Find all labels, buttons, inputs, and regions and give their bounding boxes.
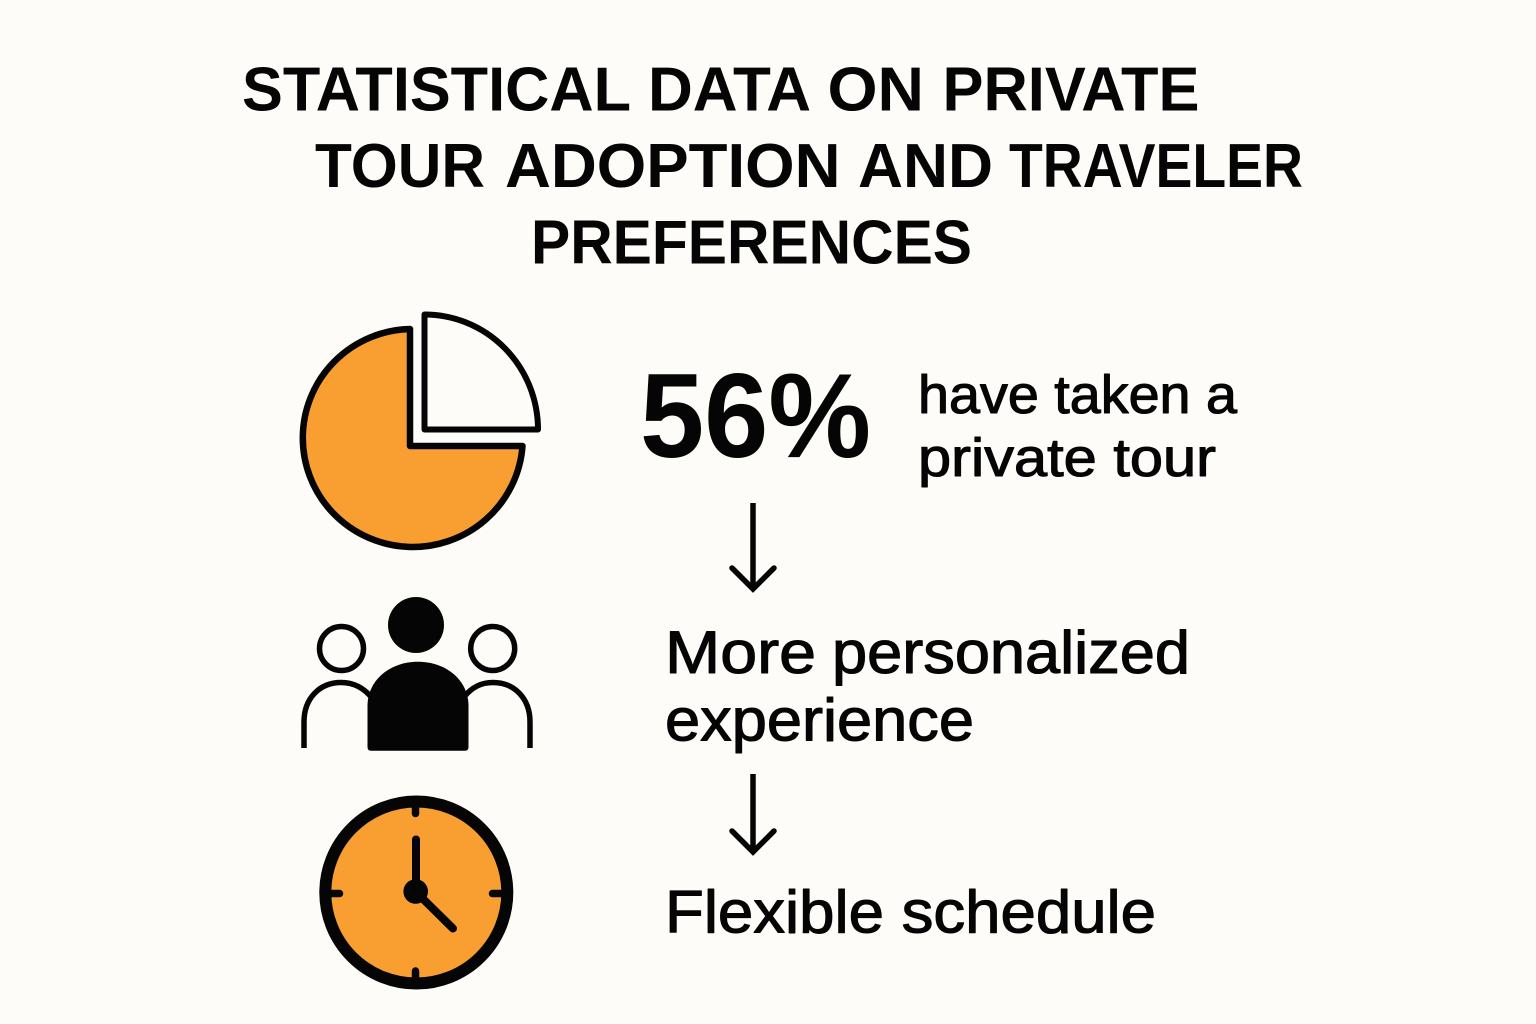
text: have taken a private tour: private tour <box>918 428 1216 488</box>
text: Flexible schedule: Flexible schedule <box>665 878 1156 946</box>
title: AND <box>858 132 993 201</box>
text: More personalized experience: personalized <box>832 619 1190 686</box>
icon: pie chart <box>303 314 538 547</box>
icon: clock <box>325 802 507 984</box>
arrow: first down arrow <box>732 503 774 589</box>
text: More personalized experience: More <box>665 619 816 686</box>
title: DATA <box>648 56 811 124</box>
title: PRIVATE <box>942 56 1200 124</box>
icon: group of people <box>304 597 530 751</box>
text: More personalized experience <box>665 619 1190 754</box>
title: TRAVELER <box>1009 132 1303 201</box>
text: More personalized experience: experience <box>665 686 974 754</box>
text: have taken a private tour <box>918 365 1238 488</box>
statistic: 56%: 56% <box>640 349 871 483</box>
title: ADOPTION <box>505 132 840 201</box>
title: ON <box>828 56 924 124</box>
arrow: second down arrow <box>732 774 774 852</box>
text: have taken a private tour: have taken a <box>918 365 1238 425</box>
title: PREFERENCES <box>531 208 972 278</box>
title: STATISTICAL <box>242 56 631 124</box>
title <box>242 56 1303 278</box>
title: TOUR <box>315 132 485 201</box>
